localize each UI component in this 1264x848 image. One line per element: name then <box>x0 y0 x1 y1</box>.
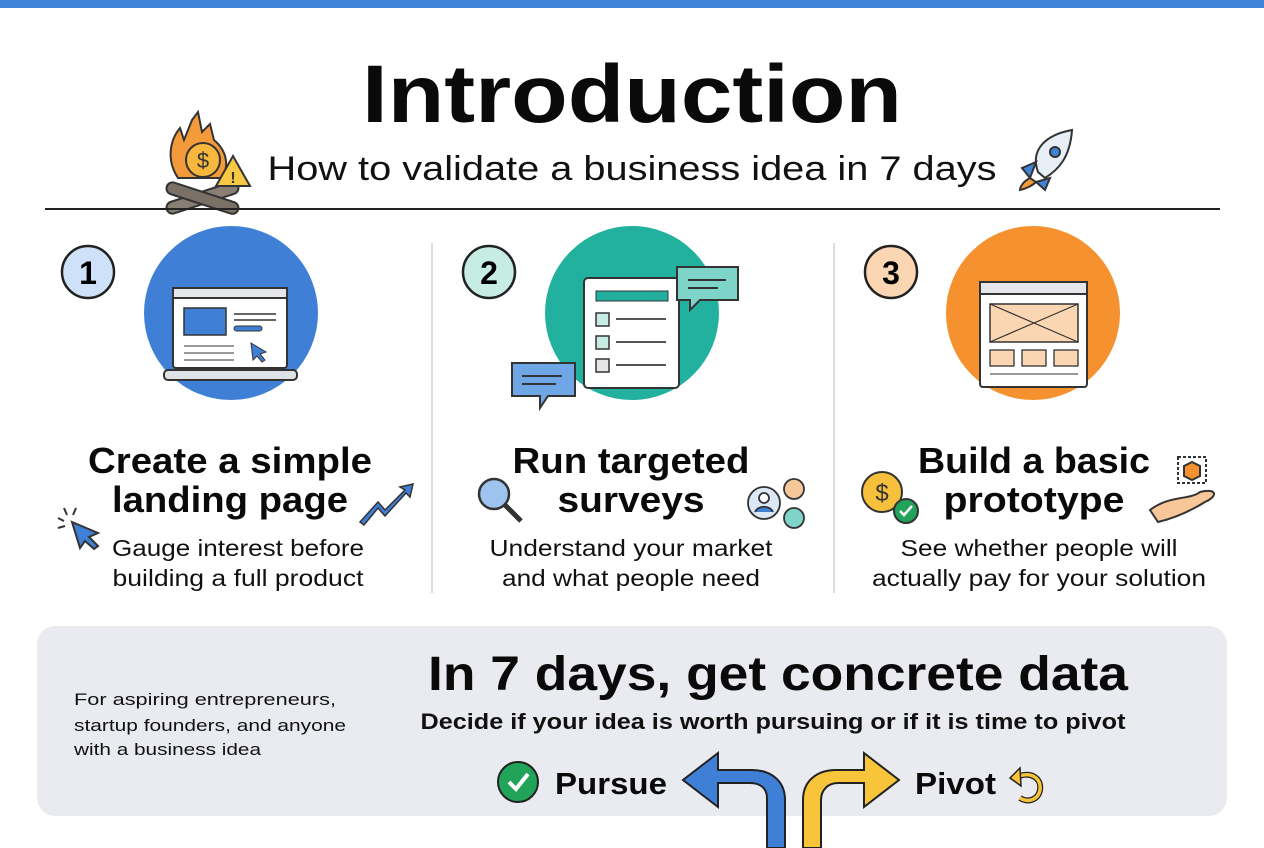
text: step 2 description: and what people need <box>502 565 760 591</box>
icon: click cursor <box>58 508 98 549</box>
number badge 2: 2 <box>480 255 498 291</box>
text: audience: with a business idea <box>73 740 262 759</box>
number badge 1 <box>62 246 114 298</box>
icon: coin with check: $ <box>875 480 889 507</box>
subtitle: How to validate a business idea in 7 days <box>268 150 996 188</box>
heading: step 2: surveys <box>558 479 704 520</box>
icon: pivot return <box>1010 768 1040 800</box>
icon: hand with box <box>1150 457 1214 522</box>
text: step 1 description: Gauge interest before <box>112 535 364 561</box>
panel: conclusion <box>37 626 1227 848</box>
heading: step 1: Create a simple <box>88 440 372 481</box>
label: pursue: Pursue <box>555 766 667 801</box>
panel: step 1 <box>58 226 413 591</box>
title: Introduction <box>362 49 902 140</box>
heading: step 3: Build a basic <box>918 440 1150 481</box>
text: step 3 description: actually pay for your solution <box>872 565 1206 591</box>
arrow: yellow right <box>803 753 899 848</box>
text: step 3 description: See whether people will <box>900 535 1178 561</box>
text: audience: startup founders, and anyone <box>74 716 346 735</box>
heading: step 2 <box>512 440 750 520</box>
text: decide: Decide if your idea is worth pursuing or if it is time to pivot <box>420 709 1126 734</box>
icon: survey form <box>512 226 738 408</box>
heading: concrete data: In 7 days, get concrete data <box>428 648 1128 701</box>
icon: people <box>748 479 804 528</box>
text: audience <box>73 690 346 759</box>
icon: rocket <box>1020 130 1072 190</box>
text: step 1 description: building a full product <box>112 565 364 591</box>
number badge 3 <box>865 246 917 298</box>
number badge 1: 1 <box>79 255 97 291</box>
arrow: blue left <box>683 753 785 848</box>
icon: burning money campfire: $ <box>197 148 209 173</box>
heading: step 1 <box>88 440 372 520</box>
icon: wireframe prototype <box>946 226 1120 400</box>
panel: step 2 <box>463 226 804 591</box>
heading: step 2: Run targeted <box>512 440 750 481</box>
icon: laptop landing page <box>144 226 318 400</box>
icon: coin with check <box>862 472 918 523</box>
text: step 2 description <box>490 535 773 591</box>
icon: burning money campfire: ! <box>230 170 236 187</box>
number badge 3: 3 <box>882 255 900 291</box>
icon: magnifier <box>479 479 521 521</box>
text: step 2 description: Understand your market <box>490 535 773 561</box>
number badge 2 <box>463 246 515 298</box>
text: step 3 description <box>872 535 1206 591</box>
icon: burning money campfire <box>165 112 250 215</box>
heading: step 1: landing page <box>112 479 348 520</box>
text: step 1 description <box>112 535 364 591</box>
text: audience: For aspiring entrepreneurs, <box>74 690 336 709</box>
heading: step 3: prototype <box>944 479 1124 520</box>
heading: step 3 <box>918 440 1150 520</box>
label: pivot: Pivot <box>915 766 996 801</box>
icon: trend arrow <box>360 484 413 525</box>
icon: check pursue <box>498 762 538 802</box>
panel: step 3 <box>862 226 1214 591</box>
